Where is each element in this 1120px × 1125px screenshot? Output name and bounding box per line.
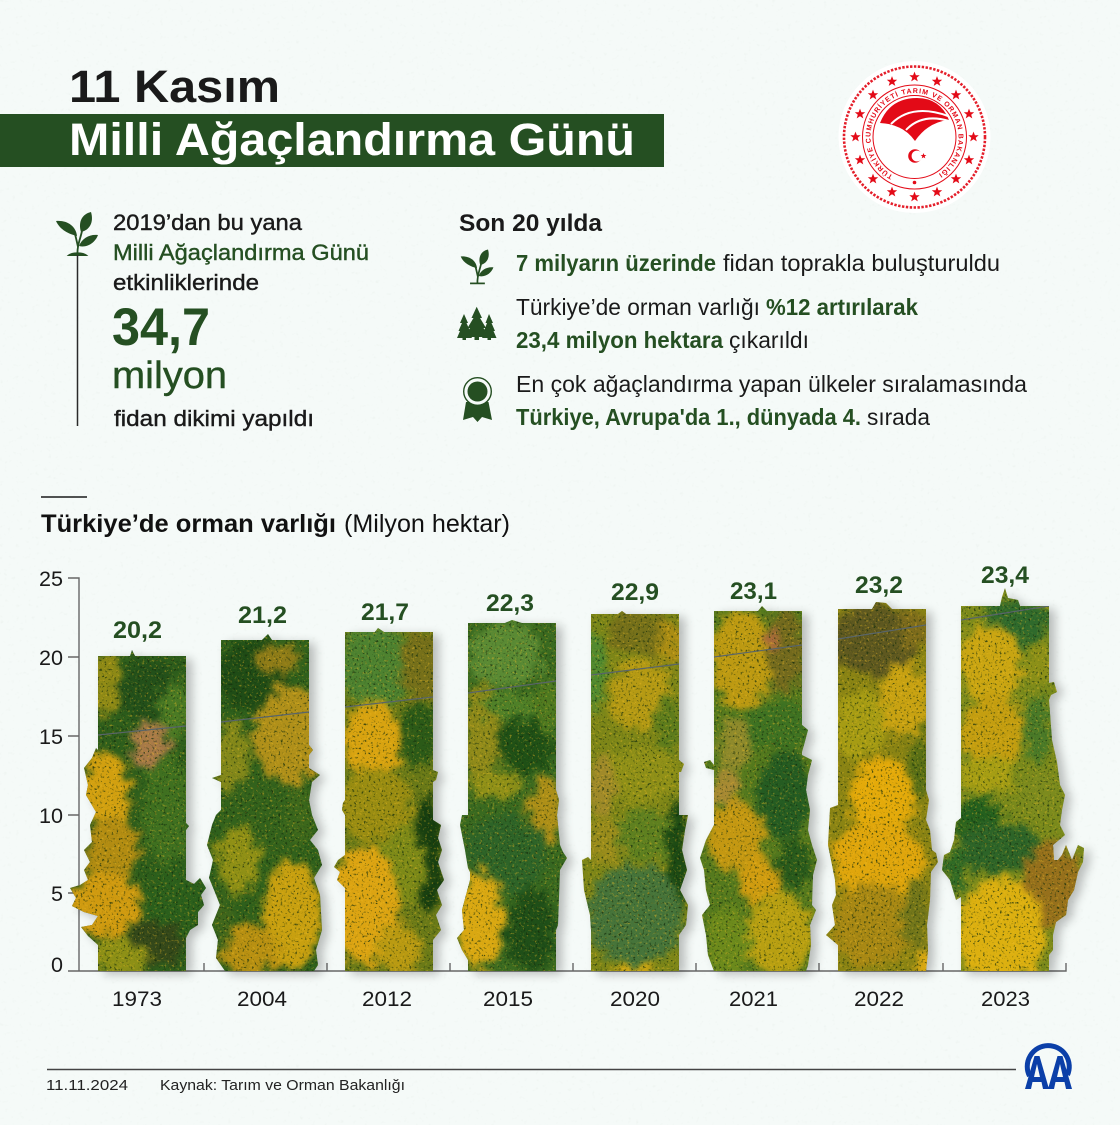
text block: 34,7 million saplings: milyon: [112, 355, 227, 397]
bar 2022: 23,2: [826, 602, 938, 971]
title banner: Milli Ağaçlandırma Günü: [69, 114, 635, 165]
text: afforestation ranking: En çok ağaçlandırma yapan ülkeler sıralamasında: [516, 371, 1027, 397]
value labels: 21,2: [238, 602, 287, 629]
y axis: 25: [39, 568, 63, 591]
x axis: [68, 963, 1066, 971]
chart heading: [41, 497, 510, 538]
footer: date and source: [46, 1070, 1016, 1094]
icon: sprout: [461, 249, 493, 283]
year labels: 2004: [237, 988, 287, 1011]
value labels: 22,3: [486, 590, 534, 617]
text: afforestation ranking: [516, 371, 1027, 430]
text: forest growth: %12 artırılarak: [766, 294, 918, 320]
chart heading: (Milyon hektar): [344, 510, 510, 538]
year labels: 2021: [729, 988, 778, 1011]
year labels: 2015: [483, 988, 533, 1011]
text: afforestation ranking: Türkiye, Avrupa'da 1., dünyada 4.: [516, 404, 861, 430]
text: forest growth: [516, 294, 918, 353]
bar 2004: 21,2: [207, 634, 322, 971]
text: afforestation ranking: sırada: [867, 404, 930, 430]
bar chart: forest area: [39, 562, 1090, 1011]
bar shadows: [76, 591, 1090, 974]
text: forest growth: çıkarıldı: [729, 327, 809, 353]
y axis: 20: [39, 647, 63, 670]
footer: date and source: 11.11.2024: [46, 1077, 128, 1094]
value labels: 23,4: [981, 562, 1030, 589]
text: forest growth: Türkiye’de orman varlığı: [516, 294, 760, 320]
value labels: 22,9: [611, 579, 659, 606]
text block: 34,7 million saplings: 34,7: [112, 298, 210, 357]
ministry seal: [838, 61, 990, 213]
text block: 34,7 million saplings: 2019’dan bu yana: [113, 210, 303, 235]
year labels: 2023: [981, 988, 1030, 1011]
bar 2020: 22,9: [582, 611, 688, 971]
chart heading: Türkiye’de orman varlığı: [41, 510, 336, 538]
text block: 34,7 million saplings: etkinliklerinde: [113, 270, 259, 295]
text: saplings planted: 7 milyarın üzerinde: [516, 250, 716, 276]
value labels: 23,1: [730, 578, 777, 605]
value labels: [113, 562, 1030, 644]
value labels: 21,7: [361, 599, 409, 626]
footer: date and source: Kaynak: Tarım ve Orman Bakanlığı: [160, 1077, 405, 1094]
bar 2012: 21,7: [334, 628, 444, 971]
y axis: 0: [51, 954, 63, 977]
text: forest growth: 23,4 milyon hektara: [516, 327, 723, 353]
y axis: 15: [39, 726, 63, 749]
bar 2023: 23,4: [942, 588, 1084, 971]
text block: 34,7 million saplings: [112, 210, 369, 431]
bar 2015: 22,3: [457, 620, 567, 971]
y axis: 5: [51, 883, 63, 906]
year labels: 1973: [112, 988, 162, 1011]
icon: pine trees: [457, 307, 496, 340]
value labels: 20,2: [113, 617, 162, 644]
icon: sapling with stem: [56, 212, 98, 426]
text: saplings planted: [516, 250, 1000, 276]
text: saplings planted: fidan toprakla buluşturuldu: [723, 250, 1000, 276]
bar 2021: 23,1: [700, 606, 817, 971]
value labels: 23,2: [855, 572, 903, 599]
year labels: [112, 988, 1030, 1011]
y axis: 10: [39, 805, 63, 828]
y axis: [39, 568, 79, 977]
logo: Anadolu Agency: [1025, 1046, 1072, 1089]
ministry seal: TÜRKİYE CUMHURİYETİ TARIM VE ORMAN BAKANLIĞI: [866, 88, 964, 180]
year labels: 2020: [610, 988, 660, 1011]
text block: 34,7 million saplings: Milli Ağaçlandırma Günü: [113, 240, 369, 265]
title: 11 Kasım: 11 Kasım: [69, 61, 280, 112]
year labels: 2022: [854, 988, 904, 1011]
icon: medal: [463, 378, 492, 422]
text block: 34,7 million saplings: fidan dikimi yapıldı: [114, 406, 314, 431]
year labels: 2012: [362, 988, 412, 1011]
heading: Son 20 yılda: Son 20 yılda: [459, 210, 603, 237]
bar 1973: 20,2: [70, 650, 206, 971]
